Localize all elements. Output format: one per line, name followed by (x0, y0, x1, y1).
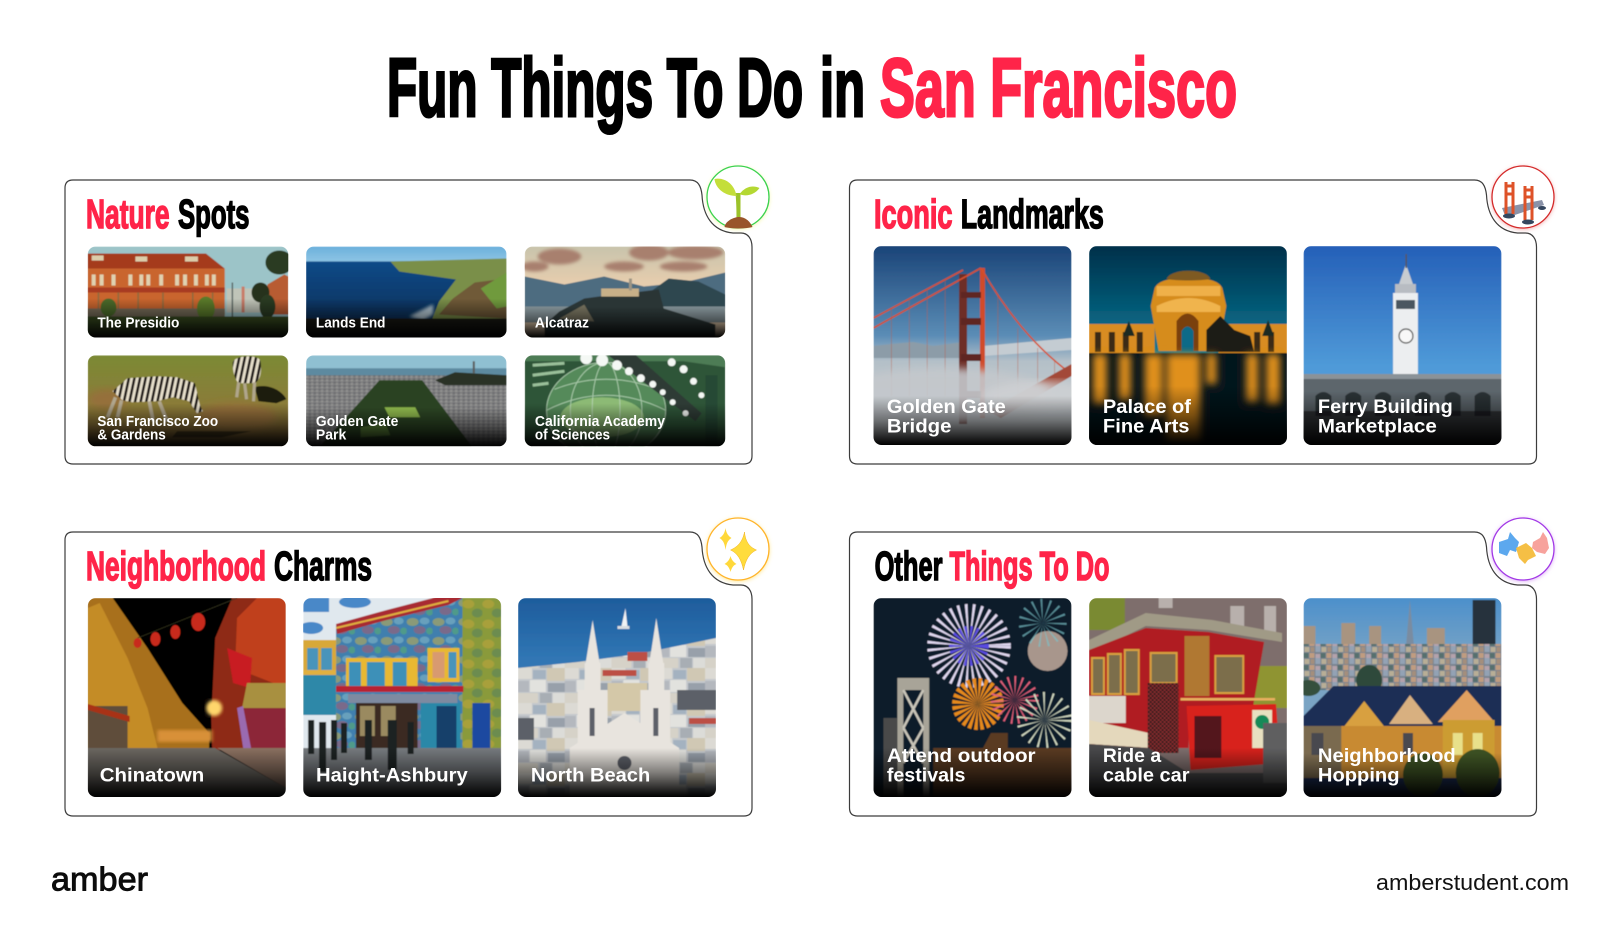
heading: Nature Spots: Nature (86, 191, 170, 237)
label: Golden Gate (316, 414, 398, 430)
card: Haight-Ashbury (299, 594, 501, 797)
heading: Iconic Landmarks: Iconic (874, 191, 952, 237)
card: North Beach (518, 598, 716, 797)
label (887, 397, 1006, 438)
logo: amber: amber (51, 860, 148, 898)
label (316, 415, 398, 440)
label: North Beach (531, 766, 650, 787)
label: Ferry Building (1318, 397, 1453, 418)
panel: Other Things To Do (850, 518, 1554, 816)
website: amberstudent.com (1376, 870, 1569, 895)
label: Neighborhood (1318, 746, 1456, 767)
label: & Gardens (97, 427, 166, 443)
card: Palace of Fine Arts (1089, 246, 1287, 445)
label: Attend outdoor (887, 746, 1036, 767)
label: The Presidio (97, 315, 180, 332)
label: California Academy (535, 414, 665, 430)
label: Palace of (1103, 397, 1192, 418)
heading: Other Things To Do: Other (875, 543, 943, 589)
label: cable car (1103, 766, 1190, 787)
icon: sprout (707, 166, 769, 229)
card: California Academy of Sciences (524, 355, 726, 446)
label (887, 748, 1036, 782)
label: festivals (887, 766, 965, 787)
label (1318, 746, 1456, 787)
card: Attend outdoor festivals (874, 598, 1072, 798)
card: San Francisco Zoo & Gardens (88, 355, 288, 446)
icon: sparkles (707, 518, 769, 581)
label (1318, 397, 1453, 438)
panel: Nature Spots (65, 166, 769, 464)
label: Lands End (316, 315, 385, 332)
card: Ferry Building Marketplace (1304, 246, 1502, 445)
card: Ride a cable car (1089, 598, 1287, 797)
label: Hopping (1318, 766, 1400, 787)
label: San Francisco Zoo (97, 414, 218, 430)
title: in (820, 41, 865, 134)
card: Chinatown (88, 598, 286, 797)
label: Park (316, 427, 347, 443)
heading: Neighborhood Charms: Neighborhood (86, 543, 266, 589)
label (98, 415, 218, 440)
card: The Presidio (88, 246, 293, 338)
title: San Francisco (880, 41, 1237, 134)
label: of Sciences (535, 427, 610, 443)
label: Fine Arts (1103, 417, 1189, 438)
label (535, 415, 665, 440)
icon: puzzle pieces (1492, 518, 1554, 581)
label: Bridge (887, 417, 952, 438)
heading: Neighborhood Charms: Charms (274, 543, 372, 589)
heading: Iconic Landmarks: Landmarks (961, 191, 1104, 237)
card: Golden Gate Bridge (874, 246, 1072, 445)
label: Marketplace (1318, 417, 1437, 438)
heading: Other Things To Do (875, 543, 1110, 589)
label (1104, 399, 1191, 432)
card: Neighborhood Hopping (1297, 598, 1502, 797)
label (1104, 748, 1190, 782)
card: Golden Gate Park (306, 355, 507, 446)
heading: Other Things To Do: Things To Do (950, 543, 1110, 589)
card: Alcatraz (521, 244, 725, 338)
icon: bridge (1492, 166, 1554, 229)
title: Fun Things To Do (387, 41, 803, 134)
heading: Nature Spots: Spots (178, 191, 250, 237)
panel: Iconic Landmarks (834, 166, 1554, 464)
panel: Neighborhood Charms (65, 518, 769, 816)
label: Haight-Ashbury (316, 766, 468, 787)
label: Alcatraz (535, 315, 589, 332)
heading: Iconic Landmarks (874, 191, 1104, 237)
label: Golden Gate (887, 397, 1006, 418)
label: Ride a (1103, 746, 1162, 767)
label: Chinatown (100, 766, 204, 787)
card: Lands End (306, 246, 507, 338)
